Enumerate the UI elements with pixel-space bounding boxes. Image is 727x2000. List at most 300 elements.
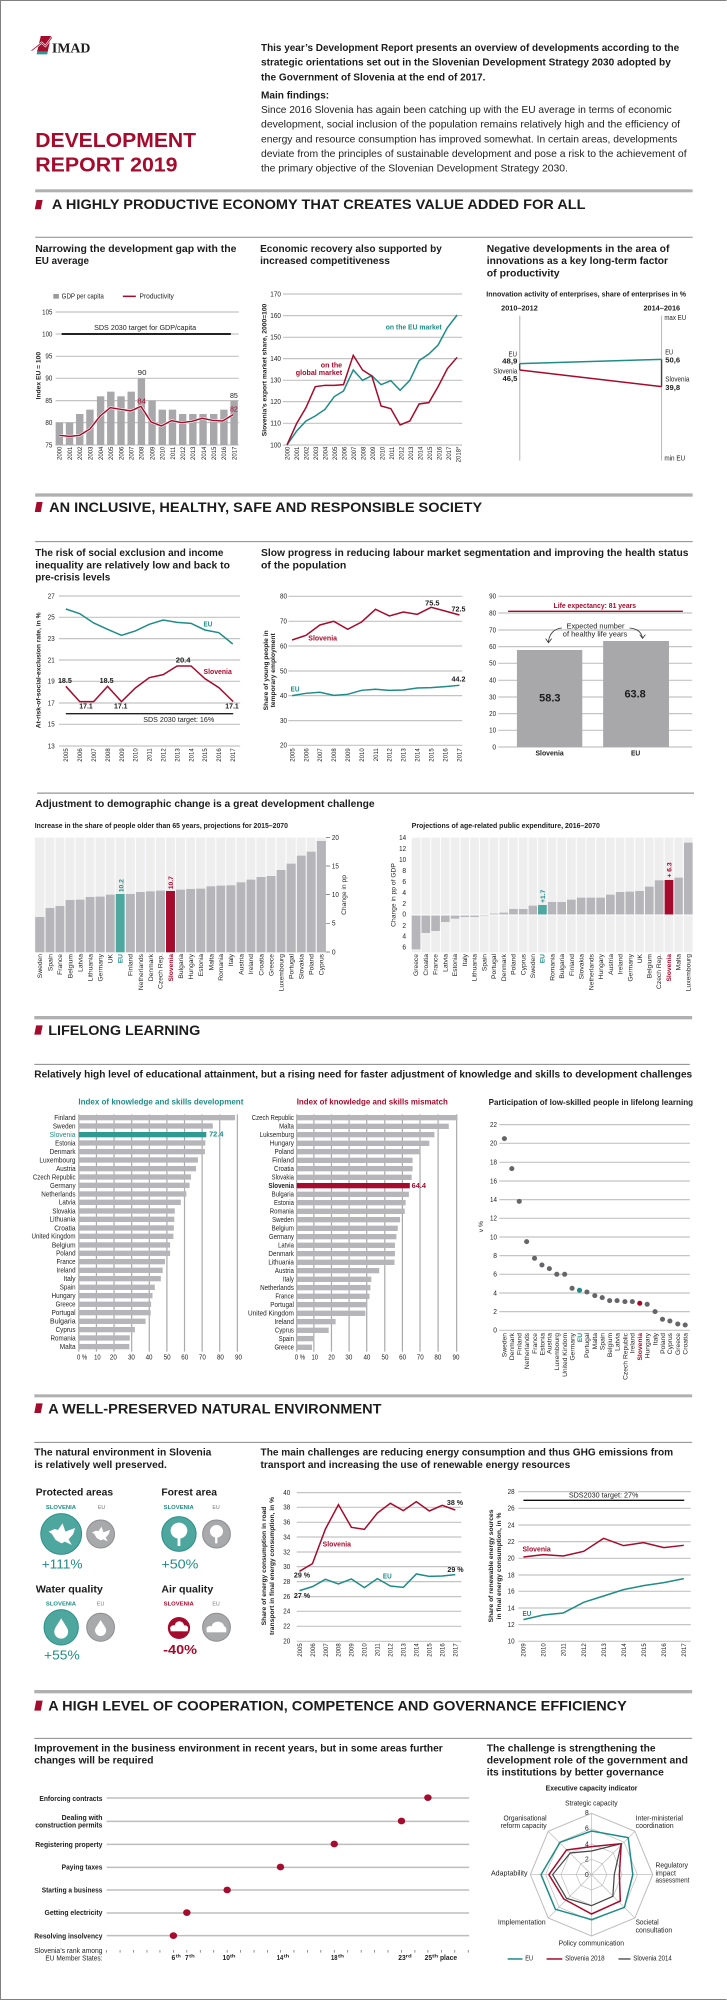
bar chart: knowledge and skills mismatch: Belgium: [272, 1224, 294, 1232]
line chart: young people in temporary employment: [263, 592, 466, 762]
line chart: young people in temporary employment: 2007: [318, 748, 324, 762]
line chart: renewable energy sources: 2013: [602, 1643, 608, 1657]
legend: radar chart: Slovenia 2014: [633, 1954, 672, 1962]
slope chart: innovation activity: 50,6: [665, 356, 680, 364]
chart: share of people older than 65: France: [57, 954, 64, 975]
legend: GDP chart: Productivity: [140, 292, 174, 300]
chart: age-related public expenditure: Germany: [627, 953, 634, 982]
chart: age-related public expenditure: Italy: [462, 953, 469, 966]
legend: radar chart: EU: [525, 1954, 533, 1962]
icon group: forest area: [161, 1486, 230, 1572]
radar chart: executive capacity indicator: impact: [656, 1869, 676, 1877]
bar chart: knowledge and skills development: Estonia: [55, 1139, 76, 1147]
bar chart: knowledge and skills mismatch: Czech Republic: [252, 1113, 294, 1122]
legend: radar chart: [508, 1954, 672, 1962]
radar chart: executive capacity indicator: assessment: [656, 1876, 690, 1884]
icon group: air quality: EU: [212, 1602, 220, 1607]
line chart: at-risk-of-social-exclusion rate: 27: [48, 592, 55, 600]
bar chart: knowledge and skills mismatch: 60: [399, 1353, 406, 1361]
chart: age-related public expenditure: Change in pp of GDP: [390, 863, 397, 927]
bar chart: knowledge and skills development: Denmark: [50, 1147, 76, 1156]
dot chart: low-skilled participation in lifelong learning: Portugal: [584, 1332, 591, 1358]
heading: natural environment preserved: is relatively well preserved.: [34, 1459, 167, 1470]
line chart: export market share: [262, 290, 462, 462]
bar chart: GDP per capita and productivity: 2004: [99, 446, 105, 460]
chart: age-related public expenditure: Lithuania: [472, 954, 479, 981]
bar chart: knowledge and skills development: Belgium: [52, 1241, 76, 1249]
line chart: at-risk-of-social-exclusion rate: At-risk-of-social-exclusion rate, in %: [35, 612, 42, 728]
bar chart: knowledge and skills mismatch: Hungary: [270, 1139, 294, 1147]
chart: age-related public expenditure: Austria: [608, 954, 615, 975]
dot chart: low-skilled participation in lifelong learning: Netherlands: [524, 1332, 531, 1369]
chart: age-related public expenditure: Projections of age-related public expenditure, 2016–2070: [412, 821, 600, 830]
icon group: protected areas: Protected areas: [36, 1486, 113, 1498]
line chart: export market share: 130: [270, 376, 281, 384]
line chart: energy consumption in road transport: 2013: [402, 1643, 408, 1657]
line chart: renewable energy sources: 2014: [622, 1643, 628, 1657]
line chart: energy consumption in road transport: 38: [283, 1503, 290, 1511]
intro text: the primary objective of the Slovenian Development Strategy 2030.: [261, 163, 568, 174]
bar chart: GDP per capita and productivity: 2007: [130, 446, 136, 460]
chart: age-related public expenditure: UK: [637, 953, 644, 963]
title: REPORT 2019: [35, 153, 178, 176]
bar chart: knowledge and skills mismatch: Germany: [269, 1232, 294, 1241]
line chart: export market share: 100: [270, 441, 281, 449]
line chart: renewable energy sources: Slovenia: [522, 1545, 551, 1553]
dot chart: low-skilled participation in lifelong learning: Hungary: [645, 1332, 652, 1358]
bar chart: GDP per capita and productivity: Index EU = 100: [35, 352, 42, 399]
bar chart: knowledge and skills development: Slovenia: [50, 1130, 76, 1139]
bar chart: healthy life years: 50: [489, 659, 496, 667]
dot plot: rank among EU member states: EU Member States:: [45, 1954, 102, 1962]
chart: age-related public expenditure: Poland: [511, 954, 518, 975]
bar chart: knowledge and skills development: 70: [199, 1353, 206, 1361]
bar chart: knowledge and skills development: 80: [217, 1353, 224, 1361]
line chart: renewable energy sources: 2011: [562, 1643, 568, 1656]
line chart: young people in temporary employment: 2010: [360, 748, 366, 762]
line chart: renewable energy sources: 2015: [642, 1643, 648, 1657]
bar chart: GDP per capita and productivity: 105: [42, 308, 53, 316]
bar chart: knowledge and skills mismatch: 70: [417, 1353, 424, 1361]
chart: age-related public expenditure: Portugal: [491, 953, 498, 979]
line chart: young people in temporary employment: 20: [280, 741, 287, 749]
line chart: energy consumption in road transport: 30: [283, 1562, 290, 1571]
dot chart: low-skilled participation in lifelong learning: Latvia: [614, 1333, 621, 1351]
dot chart: low-skilled participation in lifelong learning: Greece: [675, 1333, 682, 1355]
slope chart: innovation activity: 2010–2012: [501, 304, 538, 312]
icon: IMAD logo: [32, 36, 90, 56]
bar chart: healthy life years: Life expectancy: 81 years: [554, 601, 636, 610]
chart: age-related public expenditure: 0: [402, 910, 406, 918]
radar chart: executive capacity indicator: Organisational: [503, 1814, 547, 1822]
chart: share of people older than 65: Greece: [269, 954, 276, 976]
slope chart: innovation activity: Slovenia: [493, 367, 518, 375]
bar chart: GDP per capita and productivity: 95: [45, 352, 53, 360]
bar chart: GDP per capita and productivity: SDS 2030 target for GDP/capita: [94, 323, 196, 332]
line chart: energy consumption in road transport: 34: [283, 1533, 290, 1541]
chart: age-related public expenditure: +1.7: [540, 889, 547, 903]
line chart: export market share: 2017: [447, 446, 453, 460]
bar chart: GDP per capita and productivity: 100: [42, 330, 53, 338]
line chart: young people in temporary employment: 72.5: [452, 605, 466, 613]
chart: share of people older than 65: [35, 821, 348, 991]
dot chart: low-skilled participation in lifelong learning: 2: [493, 1307, 497, 1316]
line chart: young people in temporary employment: 75.5: [425, 599, 440, 607]
line chart: renewable energy sources: [488, 1487, 691, 1657]
chart: share of people older than 65: Slovenia: [168, 954, 175, 982]
radar chart: executive capacity indicator: Executive capacity indicator: [546, 1784, 638, 1792]
chart: share of people older than 65: Portugal: [288, 953, 295, 979]
line chart: renewable energy sources: 26: [508, 1504, 515, 1512]
line chart: energy consumption in road transport: 40: [283, 1488, 290, 1497]
line chart: young people in temporary employment: 2013: [402, 748, 408, 762]
heading: labour market and health: of the population: [261, 559, 346, 571]
line chart: export market share: 2016: [437, 446, 443, 460]
line chart: young people in temporary employment: 2015: [429, 748, 435, 762]
line chart: energy consumption in road transport: 2009: [350, 1643, 356, 1657]
bar chart: GDP per capita and productivity: 85: [230, 391, 238, 400]
line chart: young people in temporary employment: 70: [280, 617, 287, 625]
dot chart: low-skilled participation in lifelong learning: Italy: [652, 1332, 659, 1345]
slope chart: innovation activity: 2014–2016: [643, 304, 680, 312]
bar chart: knowledge and skills mismatch: Denmark: [268, 1249, 294, 1258]
panel: lifelong learning: [32, 1016, 693, 1380]
dot chart: low-skilled participation in lifelong learning: 14: [490, 1195, 497, 1204]
line chart: young people in temporary employment: EU: [291, 685, 299, 693]
bar chart: knowledge and skills mismatch: Slovakia: [272, 1173, 294, 1181]
line chart: energy consumption in road transport: 36: [283, 1518, 290, 1526]
bar chart: knowledge and skills development: Slovakia: [52, 1207, 76, 1215]
line chart: renewable energy sources: in final energy consumption, in %: [496, 1513, 503, 1619]
bar chart: knowledge and skills development: Latvia: [59, 1198, 76, 1206]
bar chart: knowledge and skills development: Cyprus: [56, 1325, 76, 1334]
chart: age-related public expenditure: Luxembourg: [685, 954, 692, 991]
line chart: renewable energy sources: 16: [508, 1587, 515, 1595]
dot chart: low-skilled participation in lifelong learning: [478, 1098, 693, 1380]
line chart: renewable energy sources: 2010: [542, 1643, 548, 1657]
bar chart: knowledge and skills development: Index of knowledge and skills development: [78, 1098, 244, 1107]
bar chart: knowledge and skills mismatch: Greece: [274, 1343, 294, 1351]
line chart: renewable energy sources: 2016: [662, 1643, 668, 1657]
dot plot: rank among EU member states: Paying taxes: [62, 1863, 103, 1871]
chart: share of people older than 65: Italy: [228, 953, 235, 966]
bar chart: knowledge and skills development: Croatia: [54, 1224, 76, 1232]
dot chart: low-skilled participation in lifelong learning: 8: [493, 1251, 497, 1260]
bar chart: knowledge and skills mismatch: France: [275, 1292, 294, 1300]
dot chart: low-skilled participation in lifelong learning: Malta: [592, 1333, 599, 1349]
dot plot: rank among EU member states: Enforcing contracts: [39, 1794, 103, 1803]
line chart: export market share: 2012: [399, 446, 405, 460]
bar chart: knowledge and skills mismatch: United Kingdom: [248, 1309, 294, 1317]
radar chart: executive capacity indicator: Inter-ministerial: [636, 1814, 683, 1822]
bar chart: knowledge and skills development: France: [57, 1257, 76, 1266]
line chart: at-risk-of-social-exclusion rate: [35, 592, 240, 762]
chart: age-related public expenditure: Bulgaria: [559, 954, 566, 979]
line chart: at-risk-of-social-exclusion rate: Slovenia: [204, 667, 232, 676]
bar chart: healthy life years: 70: [489, 626, 496, 634]
line chart: energy consumption in road transport: 2006: [311, 1643, 317, 1657]
chart: share of people older than 65: Latvia: [78, 954, 85, 972]
radar chart: executive capacity indicator: Adaptability: [491, 1869, 528, 1877]
line chart: energy consumption in road transport: 32: [283, 1548, 290, 1556]
bar chart: knowledge and skills development: Greece: [56, 1300, 76, 1308]
radar chart: executive capacity indicator: 6: [585, 1824, 589, 1832]
bar chart: knowledge and skills mismatch: Luksemburg: [260, 1130, 294, 1139]
line chart: renewable energy sources: 18: [508, 1571, 515, 1579]
chart: share of people older than 65: Netherlands: [138, 953, 145, 990]
slope chart: innovation activity: EU: [509, 350, 517, 358]
radar chart: executive capacity indicator: 8: [585, 1808, 589, 1817]
bar chart: knowledge and skills development: 0 %: [77, 1353, 87, 1361]
bar chart: healthy life years: [489, 592, 692, 757]
icon group: protected areas: SLOVENIA: [46, 1505, 76, 1511]
dot plot: rank among EU member states: 6: [172, 1953, 175, 1962]
line chart: at-risk-of-social-exclusion rate: EU: [204, 620, 212, 628]
bar chart: knowledge and skills mismatch: Latvia: [278, 1241, 294, 1249]
chart: age-related public expenditure: Cyprus: [520, 953, 527, 975]
chart: age-related public expenditure: Finland: [569, 954, 576, 976]
icon group: water quality: SLOVENIA: [46, 1602, 76, 1607]
bar chart: knowledge and skills mismatch: Sweden: [272, 1215, 294, 1224]
heading: business environment: [34, 1742, 443, 1766]
bar chart: GDP per capita and productivity: 2009: [150, 446, 156, 460]
chart: share of people older than 65: Austria: [238, 954, 245, 975]
line chart: energy consumption in road transport: 38 %: [447, 1498, 464, 1507]
line chart: export market share: 2008: [361, 446, 367, 460]
chart: age-related public expenditure: Croatia: [423, 954, 430, 976]
bar chart: healthy life years: 20: [489, 709, 496, 718]
line chart: young people in temporary employment: 2012: [388, 748, 394, 762]
line chart: export market share: 2011: [390, 446, 396, 460]
line chart: at-risk-of-social-exclusion rate: 2011: [148, 748, 154, 761]
line chart: young people in temporary employment: 50: [280, 667, 287, 675]
dot plot: rank among EU member states: place: [440, 1953, 457, 1962]
slope chart: innovation activity: 46,5: [503, 374, 518, 383]
chart: age-related public expenditure: Denmark: [501, 953, 508, 981]
intro text: [261, 42, 687, 174]
bar chart: knowledge and skills mismatch: Index of knowledge and skills mismatch: [297, 1098, 448, 1107]
chart: age-related public expenditure: [390, 821, 693, 991]
chart: share of people older than 65: 15: [332, 862, 339, 870]
line chart: export market share: 150: [270, 333, 281, 341]
line chart: export market share: 2014: [418, 446, 424, 460]
dot chart: low-skilled participation in lifelong learning: Luxembourg: [554, 1333, 561, 1370]
heading: energy challenges: transport and increasing the use of renewable energy resources: [261, 1459, 570, 1470]
heading: business environment: Improvement in the business environment in recent years, but in some areas further: [34, 1742, 443, 1754]
bar chart: GDP per capita and productivity: 85: [45, 396, 53, 405]
bar chart: GDP per capita and productivity: 2014: [202, 446, 208, 460]
line chart: energy consumption in road transport: 27 %: [294, 1591, 311, 1600]
dot chart: low-skilled participation in lifelong learning: 22: [490, 1120, 497, 1129]
line chart: energy consumption in road transport: 2011: [376, 1643, 382, 1656]
panel: cooperation and governance: [34, 1690, 692, 1962]
bar chart: knowledge and skills development: [32, 1098, 244, 1361]
icon group: forest area: SLOVENIA: [164, 1505, 194, 1511]
chart: share of people older than 65: Czech Rep.: [158, 954, 165, 989]
line chart: energy consumption in road transport: 2017: [454, 1643, 460, 1657]
bar chart: knowledge and skills mismatch: 0 %: [295, 1353, 305, 1361]
radar chart: executive capacity indicator: Strategic capacity: [565, 1799, 618, 1807]
title: [35, 129, 197, 176]
line chart: young people in temporary employment: 40: [280, 691, 287, 700]
dot chart: low-skilled participation in lifelong learning: 16: [490, 1177, 497, 1185]
bar chart: knowledge and skills development: Finland: [54, 1113, 76, 1122]
icon group: air quality: Air quality: [161, 1584, 213, 1595]
dot plot: rank among EU member states: Getting electricity: [45, 1908, 103, 1917]
line chart: at-risk-of-social-exclusion rate: 2010: [134, 748, 140, 762]
line chart: export market share: 2009: [371, 446, 377, 460]
line chart: energy consumption in road transport: 2015: [428, 1643, 434, 1657]
line chart: at-risk-of-social-exclusion rate: 13: [48, 742, 55, 750]
line chart: at-risk-of-social-exclusion rate: 17: [48, 699, 55, 707]
bar chart: healthy life years: 90: [489, 592, 496, 600]
line chart: at-risk-of-social-exclusion rate: 2017: [231, 748, 237, 762]
bar chart: knowledge and skills development: Netherlands: [41, 1190, 76, 1198]
dot plot: rank among EU member states: Dealing with: [62, 1813, 102, 1822]
radar chart: executive capacity indicator: 2: [585, 1855, 589, 1863]
line chart: energy consumption in road transport: 2016: [441, 1643, 447, 1657]
chart: age-related public expenditure: 6: [402, 877, 406, 886]
bar chart: knowledge and skills mismatch: Portugal: [270, 1300, 294, 1309]
bar chart: healthy life years: EU: [631, 749, 640, 757]
line chart: young people in temporary employment: 2008: [332, 748, 338, 762]
line chart: at-risk-of-social-exclusion rate: 18.5: [100, 676, 114, 685]
line chart: at-risk-of-social-exclusion rate: 18.5: [58, 676, 72, 685]
chart: age-related public expenditure: 10: [399, 855, 406, 864]
line chart: young people in temporary employment: 80: [280, 592, 287, 600]
bar chart: GDP per capita and productivity: 2002: [78, 446, 84, 460]
bar chart: healthy life years: Expected number: [567, 622, 625, 630]
bar chart: healthy life years: of healthy life years: [563, 630, 627, 638]
line chart: export market share: 2000: [285, 446, 291, 460]
dot plot: rank among EU member states: th: [189, 1954, 195, 1959]
title: DEVELOPMENT: [35, 129, 197, 152]
bar chart: healthy life years: 60: [489, 642, 496, 651]
dot plot: rank among EU member states: Resolving insolvency: [34, 1932, 103, 1940]
line chart: energy consumption in road transport: 2012: [389, 1643, 395, 1657]
line chart: export market share: 2005: [333, 446, 339, 460]
heading: competitiveness: [260, 243, 442, 266]
bar chart: knowledge and skills mismatch: Spain: [279, 1334, 294, 1343]
panel: natural environment: [34, 1394, 692, 1663]
heading: demographic change: Adjustment to demographic change is a great development challenge: [35, 798, 375, 809]
dot chart: low-skilled participation in lifelong learning: Austria: [547, 1333, 554, 1354]
bar chart: knowledge and skills development: Germany: [50, 1181, 76, 1190]
bar chart: healthy life years: 63.8: [624, 687, 646, 700]
bar chart: GDP per capita and productivity: 2008: [140, 446, 146, 460]
line chart: at-risk-of-social-exclusion rate: 2007: [92, 748, 98, 762]
bar chart: knowledge and skills mismatch: 80: [434, 1353, 442, 1361]
bar chart: knowledge and skills development: Hungary: [51, 1291, 76, 1300]
radar chart: executive capacity indicator: Societal: [636, 1918, 659, 1926]
heading: development gap: EU average: [35, 255, 89, 266]
line chart: renewable energy sources: 10: [508, 1637, 515, 1645]
dot chart: low-skilled participation in lifelong learning: Cyprus: [667, 1332, 674, 1354]
line chart: at-risk-of-social-exclusion rate: 17.1: [225, 702, 239, 710]
chart: share of people older than 65: 0: [332, 948, 336, 956]
slope chart: innovation activity: min EU: [664, 454, 685, 462]
line chart: at-risk-of-social-exclusion rate: 23: [48, 634, 55, 643]
chart: age-related public expenditure: Slovakia: [579, 954, 586, 979]
chart: share of people older than 65: Bulgaria: [178, 954, 185, 979]
bar chart: knowledge and skills development: Bulgaria: [50, 1317, 76, 1325]
bar chart: knowledge and skills mismatch: Austria: [275, 1266, 294, 1275]
legend: radar chart: Slovenia 2018: [565, 1954, 605, 1962]
chart: share of people older than 65: Germany: [97, 953, 104, 982]
chart: age-related public expenditure: Netherlands: [588, 953, 595, 990]
bar chart: GDP per capita and productivity: 2006: [119, 446, 125, 460]
line chart: young people in temporary employment: 60: [280, 642, 287, 650]
bar chart: GDP per capita and productivity: 2017: [232, 446, 238, 460]
chart: age-related public expenditure: + 6.3: [666, 862, 673, 878]
bar chart: GDP per capita and productivity: 2011: [171, 446, 177, 460]
line chart: at-risk-of-social-exclusion rate: 17.1: [114, 702, 128, 710]
icon group: water quality: Water quality: [36, 1584, 103, 1595]
bar chart: knowledge and skills development: Czech Republic: [33, 1173, 76, 1181]
line chart: young people in temporary employment: 2016: [443, 748, 449, 762]
line chart: export market share: 2001: [295, 446, 301, 460]
line chart: at-risk-of-social-exclusion rate: 2005: [64, 748, 70, 762]
dot chart: low-skilled participation in lifelong learning: United Kindom: [562, 1333, 569, 1377]
line chart: at-risk-of-social-exclusion rate: 2006: [78, 748, 84, 762]
dot chart: low-skilled participation in lifelong learning: 10: [490, 1233, 497, 1241]
legend: GDP chart: [53, 292, 174, 300]
bar chart: GDP per capita and productivity: 2016: [222, 446, 228, 460]
dot chart: low-skilled participation in lifelong learning: Ireland: [630, 1333, 637, 1353]
icon group: forest area: Forest area: [161, 1486, 218, 1498]
line chart: energy consumption in road transport: 2008: [337, 1643, 343, 1657]
dot chart: low-skilled participation in lifelong learning: 20: [490, 1139, 497, 1147]
heading: governance: its institutions by better governance: [487, 1767, 664, 1778]
chart: share of people older than 65: Romania: [218, 954, 225, 981]
dot plot: rank among EU member states: Registering property: [35, 1840, 103, 1849]
dot plot: rank among EU member states: th: [338, 1954, 345, 1959]
line chart: at-risk-of-social-exclusion rate: 2014: [189, 748, 195, 762]
line chart: export market share: 2002: [304, 446, 310, 460]
chart: age-related public expenditure: 4: [402, 932, 406, 940]
icon group: water quality: [36, 1584, 115, 1663]
chart: age-related public expenditure: 8: [402, 866, 406, 875]
bar chart: GDP per capita and productivity: 90: [45, 374, 53, 382]
line chart: renewable energy sources: 28: [508, 1487, 515, 1496]
icon: IMAD logo: IMAD: [52, 40, 90, 56]
slope chart: innovation activity: EU: [665, 348, 673, 356]
line chart: at-risk-of-social-exclusion rate: 21: [48, 656, 55, 664]
bar chart: GDP per capita and productivity: 80: [45, 418, 53, 427]
icon group: protected areas: EU: [98, 1505, 105, 1511]
bar chart: knowledge and skills mismatch: 64.4: [412, 1181, 426, 1190]
bar chart: knowledge and skills development: Lithuania: [50, 1215, 76, 1223]
line chart: export market share: 2010: [380, 446, 386, 460]
chart: age-related public expenditure: France: [433, 954, 440, 975]
dot chart: low-skilled participation in lifelong learning: Denmark: [509, 1332, 516, 1360]
line chart: energy consumption in road transport: EU: [383, 1572, 392, 1580]
heading: governance: The challenge is strengthening the: [487, 1742, 656, 1754]
bar chart: knowledge and skills mismatch: Poland: [274, 1147, 294, 1156]
line chart: at-risk-of-social-exclusion rate: 15: [48, 720, 55, 728]
chart: share of people older than 65: Poland: [308, 954, 315, 975]
chart: age-related public expenditure: Malta: [676, 954, 683, 970]
chart: age-related public expenditure: Czech Rep.: [656, 954, 663, 989]
line chart: export market share: 110: [270, 419, 281, 427]
chart: share of people older than 65: Croatia: [258, 954, 265, 976]
bar chart: GDP per capita and productivity: 82: [230, 405, 238, 413]
radar chart: executive capacity indicator: Regulatory: [656, 1861, 689, 1869]
heading: innovations: of productivity: [487, 268, 560, 279]
chart: age-related public expenditure: Slovenia: [666, 954, 673, 982]
line chart: renewable energy sources: 24: [508, 1521, 515, 1529]
dot plot: rank among EU member states: 10: [223, 1953, 230, 1962]
